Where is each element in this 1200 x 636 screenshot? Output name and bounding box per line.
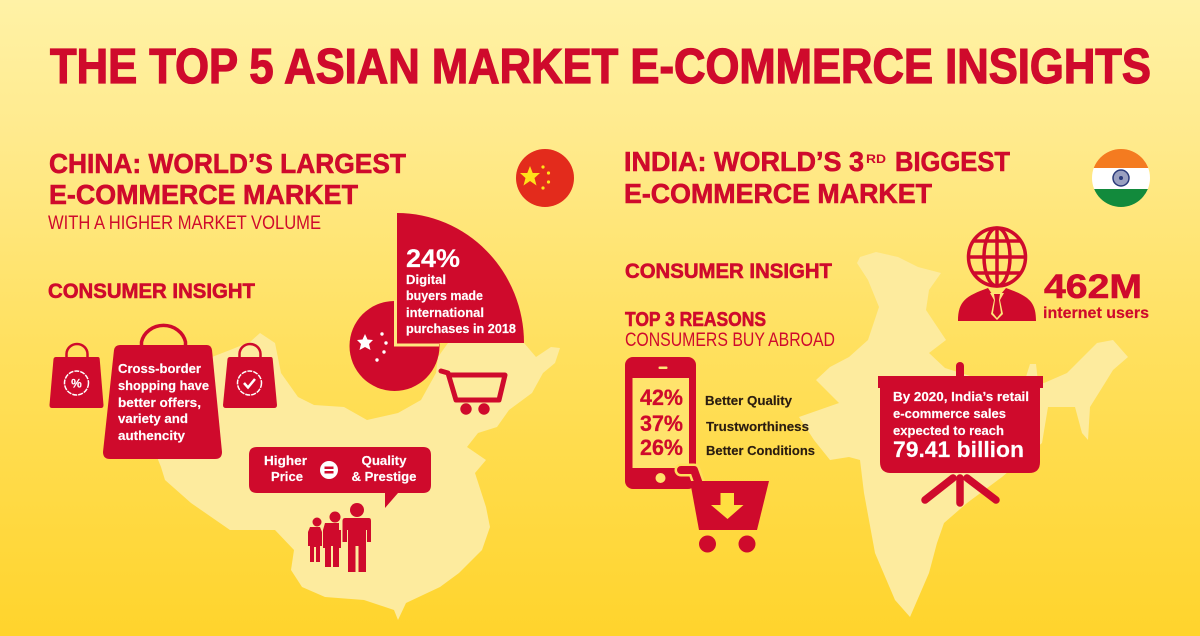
shopping bag with cross-border text: better offers, — [118, 395, 201, 410]
map: China — [150, 333, 560, 620]
top 3 reasons heading: TOP 3 REASONS — [625, 309, 766, 331]
consumer insight heading: China: CONSUMER INSIGHT — [48, 280, 255, 303]
icon: phone with percentages: 42% — [640, 385, 683, 410]
stat: 462M internet users: 462M — [1044, 268, 1142, 306]
shopping bag with cross-border text — [103, 325, 222, 459]
India heading: RD — [866, 154, 886, 166]
circle chart: 24 percent: international — [406, 306, 484, 320]
China heading: WITH A HIGHER MARKET VOLUME — [48, 212, 321, 234]
icon: China flag — [516, 149, 574, 207]
presentation board: retail sales forecast: By 2020, India’s retail — [893, 389, 1029, 404]
China heading: E-COMMERCE MARKET — [49, 179, 358, 210]
callout: higher price equals quality and prestige: Higher — [264, 453, 307, 468]
icon: people — [308, 503, 371, 572]
icon: phone with percentages: 37% — [640, 411, 683, 436]
circle chart: 24 percent: buyers made — [406, 289, 483, 303]
India heading — [624, 146, 1010, 209]
India heading: INDIA: WORLD’S 3 — [624, 146, 864, 177]
circle chart: 24 percent: 24% — [406, 245, 460, 273]
circle chart: 24 percent: Digital — [406, 273, 446, 287]
presentation board: retail sales forecast: e-commerce sales — [893, 406, 1006, 421]
section: China — [48, 148, 574, 572]
icon: shopping cart — [441, 371, 505, 415]
icon: left shopping bag with percent — [50, 344, 104, 408]
shopping bag with cross-border text: variety and — [118, 411, 188, 426]
top 3 reasons heading — [625, 309, 835, 351]
top 3 reasons heading: CONSUMERS BUY ABROAD — [625, 329, 835, 351]
icon: phone with percentages — [625, 357, 696, 489]
presentation board: retail sales forecast — [878, 366, 1043, 503]
India heading: E-COMMERCE MARKET — [624, 178, 932, 209]
presentation board: retail sales forecast: expected to reach — [893, 423, 1004, 438]
presentation board: retail sales forecast: 79.41 billion — [893, 437, 1024, 462]
callout: higher price equals quality and prestige: & Prestige — [352, 469, 416, 484]
China heading: CHINA: WORLD’S LARGEST — [49, 148, 406, 179]
section: India — [624, 146, 1152, 552]
reason labels: Better Quality — [705, 393, 793, 408]
reason labels — [705, 393, 815, 458]
India heading: BIGGEST — [895, 146, 1010, 177]
reason labels: Better Conditions — [706, 443, 815, 458]
reason labels: Trustworthiness — [706, 419, 809, 434]
circle chart: 24 percent — [350, 213, 524, 391]
callout: higher price equals quality and prestige: Quality — [362, 453, 407, 468]
shopping bag with cross-border text: authencity — [118, 428, 186, 443]
icon: left shopping bag with percent: % — [71, 376, 82, 390]
consumer insight heading: India: CONSUMER INSIGHT — [625, 260, 832, 283]
icon: cart with down arrow — [681, 470, 769, 552]
stat: 462M internet users — [1043, 268, 1149, 322]
circle chart: 24 percent: purchases in 2018 — [406, 322, 516, 336]
icon: phone with percentages: 26% — [640, 435, 683, 460]
China heading — [48, 148, 406, 234]
callout: higher price equals quality and prestige — [249, 447, 431, 508]
shopping bag with cross-border text: Cross-border — [118, 361, 201, 376]
icon: right shopping bag with check — [223, 344, 277, 408]
stat: 462M internet users: internet users — [1043, 305, 1149, 322]
shopping bag with cross-border text: shopping have — [118, 378, 209, 393]
icon: India flag — [1092, 149, 1150, 207]
icon: person with globe head — [958, 228, 1036, 321]
callout: higher price equals quality and prestige: Price — [271, 469, 303, 484]
map: India — [799, 252, 1128, 617]
